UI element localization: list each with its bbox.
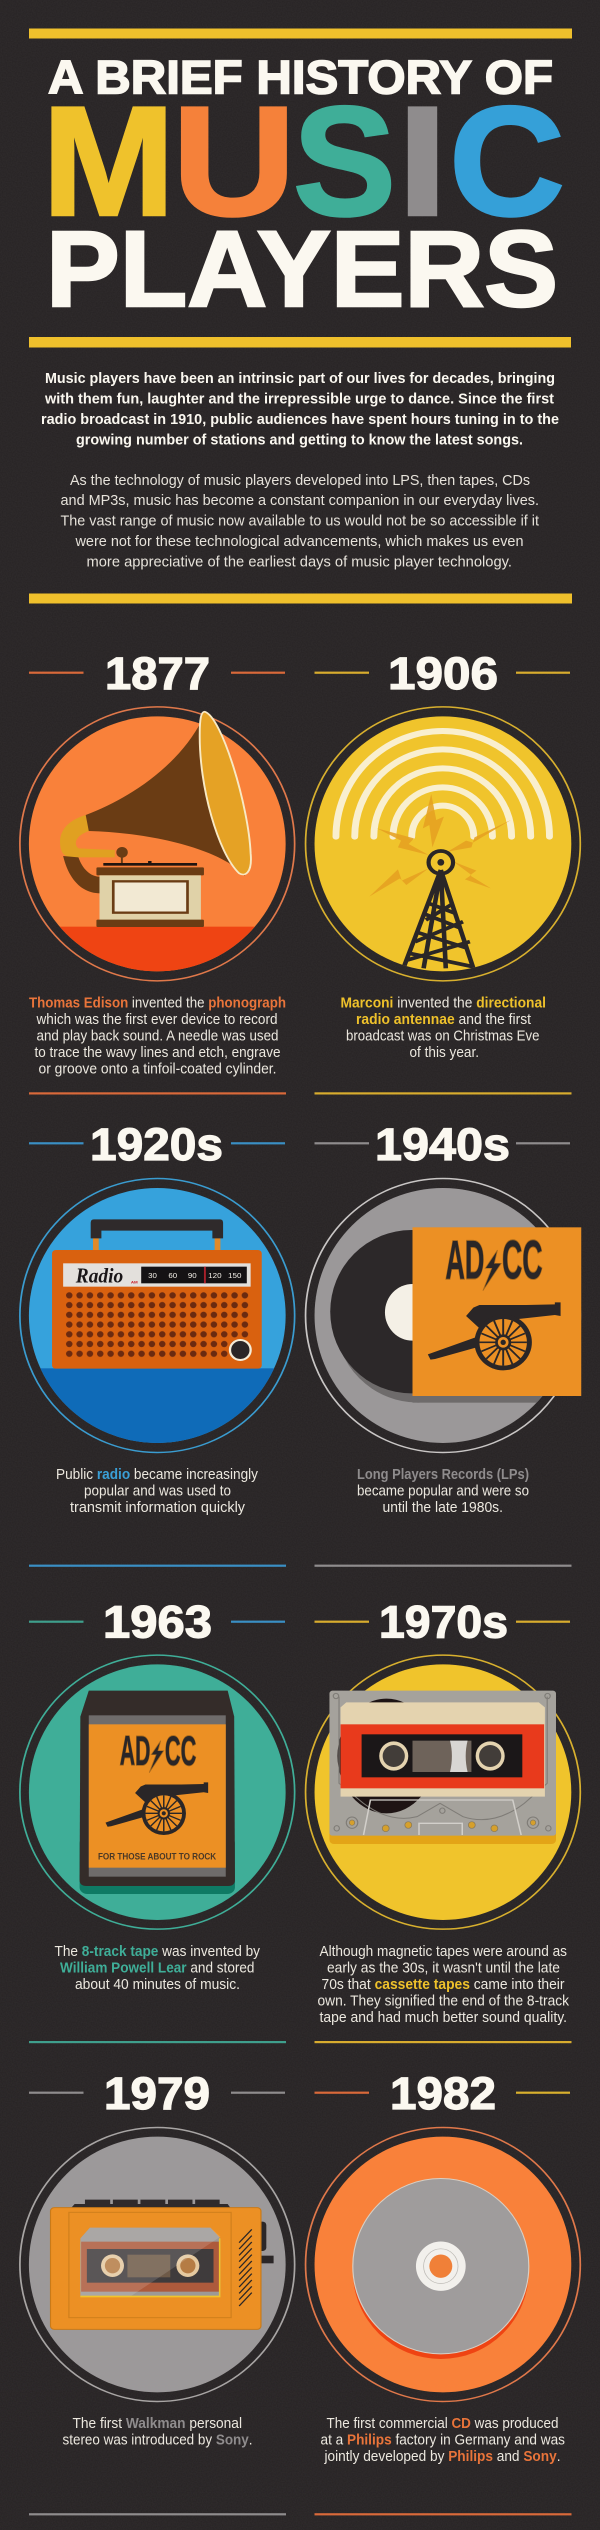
tape art: AD/CC logo and cannon: FOR THOSE ABOUT TO ROCK — [98, 1852, 216, 1862]
title word: music: S — [293, 75, 396, 249]
title word: music — [42, 75, 565, 249]
caption: 70s that cassette tapes came into their — [322, 1977, 565, 1993]
illustration: CD in orange circle — [306, 2127, 580, 2401]
caption: at a Philips factory in Germany and was — [320, 2432, 565, 2448]
intro paragraph two: The vast range of music now available to us would not be so accessible if it — [60, 512, 540, 530]
header — [29, 28, 572, 604]
illustration: 8-track tape in teal circle — [20, 1655, 295, 1929]
caption: transmit information quickly — [70, 1500, 246, 1516]
illustration: cassette tape in yellow circle — [306, 1655, 580, 1929]
caption: tape and had much better sound quality. — [320, 2010, 567, 2026]
caption: Long Players Records (LPs) — [357, 1467, 529, 1483]
title word: music: I — [397, 75, 448, 249]
caption: of this year. — [410, 1045, 479, 1061]
illustration: radio in blue circle: 90 — [188, 1271, 197, 1280]
panel: 1906 radio antenna — [306, 648, 580, 1094]
caption: to trace the wavy lines and etch, engrave — [34, 1045, 280, 1061]
intro paragraph two — [60, 472, 540, 570]
panel: 1970s cassette — [306, 1596, 580, 2043]
tape art: AD/CC logo and cannon — [98, 1727, 216, 1862]
illustration: gramophone in orange circle — [20, 707, 295, 981]
album art: AD/CC logo and cannon: CC — [502, 1228, 543, 1290]
caption: which was the first ever device to record — [36, 1012, 278, 1028]
tape art: AD/CC logo and cannon: CC — [165, 1727, 196, 1774]
panel: 1963 8-track — [20, 1596, 295, 2043]
panel: 1940s long player record — [306, 1119, 581, 1567]
heading: 1982: 1982 — [390, 2068, 496, 2119]
top yellow bar — [29, 28, 572, 38]
heading: 1979: 1979 — [104, 2068, 210, 2119]
caption — [320, 2416, 565, 2465]
heading: 1877: 1877 — [105, 648, 210, 699]
title word: music: C — [449, 75, 565, 249]
caption: radio antennae and the first — [356, 1012, 531, 1028]
caption — [62, 2416, 252, 2448]
panel: 1877 phonograph — [20, 648, 295, 1094]
caption — [54, 1944, 261, 1993]
caption — [29, 996, 286, 1078]
caption: stereo was introduced by Sony. — [62, 2432, 252, 2448]
caption: until the late 1980s. — [382, 1500, 503, 1516]
caption: The 8-track tape was invented by — [54, 1944, 261, 1960]
caption: William Powell Lear and stored — [60, 1960, 254, 1976]
heading: 1920s: 1920s — [90, 1119, 223, 1170]
intro paragraph two: As the technology of music players developed into LPS, then tapes, CDs — [70, 472, 530, 489]
illustration: transmission tower in yellow circle — [306, 707, 580, 981]
illustration: radio in blue circle: 60 — [168, 1271, 178, 1280]
third yellow bar — [29, 594, 572, 604]
illustration: radio in blue circle: Radio — [75, 1264, 123, 1287]
panel: 1920s radio — [20, 1119, 295, 1567]
panel: 1979 walkman — [20, 2068, 295, 2515]
caption: The first Walkman personal — [72, 2416, 242, 2432]
album art: AD/CC logo and cannon: AD — [445, 1228, 484, 1290]
title word: players: PLAYERS — [46, 208, 558, 329]
heading: 1940s: 1940s — [375, 1119, 510, 1170]
illustration: radio in blue circle: 30 — [148, 1271, 157, 1280]
intro paragraph two: and MP3s, music has become a constant companion in our everyday lives. — [60, 492, 539, 509]
illustration: radio in blue circle: 150 — [228, 1271, 242, 1280]
caption: popular and was used to — [84, 1484, 231, 1500]
illustration: radio in blue circle — [20, 1178, 295, 1452]
caption — [56, 1467, 259, 1516]
caption: own. They signified the end of the 8-track — [318, 1994, 570, 2010]
heading: 1906: 1906 — [388, 648, 498, 699]
illustration: radio in blue circle: 120 — [208, 1271, 222, 1280]
caption: and play back sound. A needle was used — [36, 1028, 278, 1044]
caption: or groove onto a tinfoil-coated cylinder. — [38, 1062, 276, 1078]
title word: music: U — [172, 75, 296, 249]
caption: Marconi invented the directional — [340, 996, 546, 1012]
intro paragraph one: with them fun, laughter and the irrepressible urge to dance. Since the first — [44, 390, 554, 408]
caption: The first commercial CD was produced — [326, 2416, 558, 2432]
intro paragraph two: were not for these technological advancements, which makes us even — [75, 533, 524, 550]
title line: a brief history of: A BRIEF HISTORY OF — [48, 50, 553, 104]
album art: AD/CC logo and cannon — [428, 1228, 561, 1370]
heading: 1963: 1963 — [103, 1596, 212, 1648]
caption: jointly developed by Philips and Sony. — [324, 2449, 560, 2465]
caption: broadcast was on Christmas Eve — [346, 1028, 540, 1044]
title — [42, 50, 565, 329]
caption: became popular and were so — [357, 1484, 529, 1500]
caption: Thomas Edison invented the phonograph — [29, 996, 286, 1012]
illustration: vinyl record and album sleeve — [306, 1178, 581, 1452]
intro paragraph one: radio broadcast in 1910, public audiences have spent hours tuning in to the — [41, 411, 559, 428]
intro paragraph one — [41, 370, 559, 448]
title word: music: M — [42, 75, 175, 249]
intro paragraph one: Music players have been an intrinsic part of our lives for decades, bringing — [45, 370, 555, 387]
second yellow bar — [29, 337, 571, 348]
tape art: AD/CC logo and cannon: AD — [120, 1727, 150, 1774]
illustration: walkman in grey circle — [20, 2127, 295, 2401]
illustration: radio in blue circle: AM — [131, 1280, 139, 1285]
intro paragraph one: growing number of stations and getting to know the latest songs. — [76, 432, 523, 448]
heading: 1970s: 1970s — [379, 1596, 508, 1648]
caption — [340, 996, 546, 1061]
caption — [318, 1944, 570, 2026]
intro paragraph two: more appreciative of the earliest days of music player technology. — [86, 554, 512, 570]
caption: about 40 minutes of music. — [75, 1977, 240, 1993]
panel: 1982 compact disc — [306, 2068, 580, 2515]
caption: Public radio became increasingly — [56, 1467, 259, 1483]
caption: Although magnetic tapes were around as — [320, 1944, 567, 1960]
caption: early as the 30s, it wasn't until the late — [327, 1960, 560, 1976]
caption — [357, 1467, 529, 1516]
